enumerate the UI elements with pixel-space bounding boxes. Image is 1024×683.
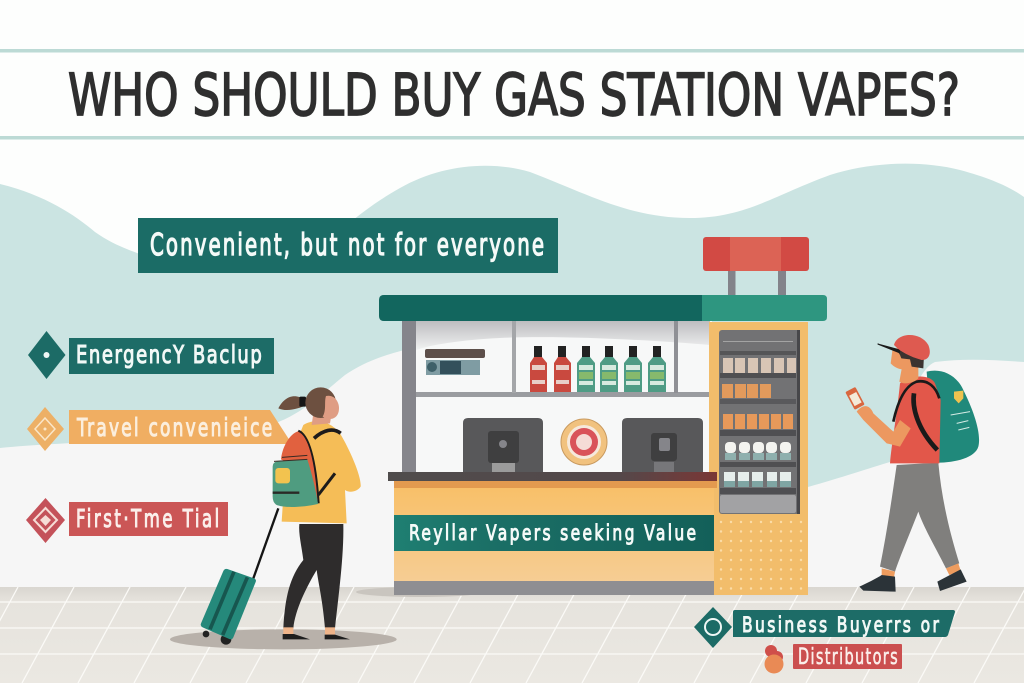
green bottle 2: [600, 346, 618, 392]
arm: [857, 406, 911, 447]
backpack: [927, 371, 979, 463]
label: distributors: [764, 644, 902, 674]
banner: regular vapers: Reyllar Vapers seeking Value: [409, 522, 696, 546]
red bottle 1: [530, 346, 547, 392]
business text: Business Buyerrs or: [742, 614, 939, 638]
shirt: [890, 376, 941, 463]
shelf dividers: [512, 321, 678, 393]
counter top: [388, 472, 717, 481]
counter orange strip: [394, 481, 717, 488]
backpack straps: [893, 381, 939, 450]
device on shelf: [425, 349, 485, 375]
travel text: Travel convenieice: [76, 414, 272, 443]
background teal hills: [0, 164, 1024, 600]
terminal right: [622, 418, 703, 472]
row 4 products: [725, 442, 791, 460]
ankles and shoes: [283, 627, 350, 639]
left post: [402, 321, 416, 476]
suitcase: [201, 569, 256, 645]
vending cabinet: [709, 322, 808, 595]
jacket: [282, 421, 361, 523]
top shadow band: [416, 321, 710, 350]
bottles: [530, 346, 666, 392]
row 3 products: [723, 414, 793, 429]
icon: orange and red blob: [764, 645, 784, 674]
green bottle 4: [648, 346, 666, 392]
green bottle 3: [624, 346, 642, 392]
title rule bottom: [0, 136, 1024, 140]
icon: teal diamond: [28, 331, 66, 379]
label: emergency backup: [28, 331, 274, 379]
green bottle 1: [577, 346, 595, 392]
phone: [845, 387, 865, 410]
ankles and shoes: [859, 563, 967, 592]
vending display: [719, 330, 800, 514]
shelf: [416, 392, 710, 397]
background white ground swell: [0, 340, 1024, 600]
woman with luggage: [170, 387, 397, 649]
man with phone: [845, 335, 979, 592]
suitcase handle: [253, 508, 278, 578]
dotted cabinet base: [714, 515, 808, 595]
pants: [880, 463, 959, 572]
row 5 products: [724, 472, 791, 487]
round badge: [561, 419, 607, 465]
label: travel convenience: [27, 407, 292, 451]
row 2 products: [722, 384, 771, 398]
terminal left: [463, 418, 543, 472]
stand shadow: [356, 587, 484, 597]
sign: [703, 237, 809, 296]
roof: [379, 295, 827, 321]
distributors text: Distributors: [798, 645, 898, 670]
first-time text: First·Tme Tial: [76, 503, 219, 533]
counter body: [394, 488, 714, 582]
banner: regular vapers: [394, 515, 714, 551]
subtitle banner: Convenient, but not for everyone: [150, 227, 544, 262]
counter base: [394, 581, 714, 595]
leggings: [283, 524, 343, 628]
ground shadow: [170, 629, 397, 649]
row 1 products: [723, 358, 796, 373]
emergency text: EnergencY Baclup: [76, 341, 262, 370]
red bottle 2: [554, 346, 571, 392]
label: first-time trial: [26, 498, 228, 543]
interior wall: [402, 321, 712, 476]
head: [278, 387, 339, 425]
icon: red diamond: [26, 498, 65, 543]
icon: orange diamond: [27, 407, 64, 451]
label: business buyers: [694, 607, 955, 648]
floor tiles: [0, 587, 1024, 683]
icon: ring diamond: [694, 607, 732, 648]
title rule top: [0, 49, 1024, 52]
backpack: [273, 430, 341, 507]
kiosk: [356, 237, 827, 597]
head: [878, 335, 930, 383]
subtitle banner: [138, 218, 558, 273]
